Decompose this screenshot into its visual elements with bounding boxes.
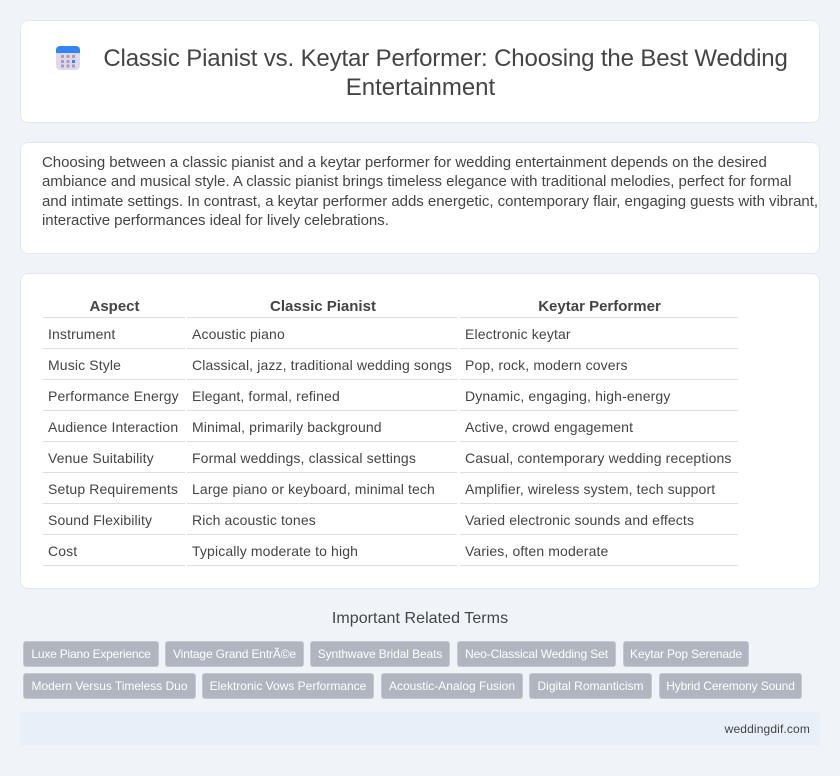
row: performance energy: Performance Energy xyxy=(48,388,179,404)
row: audience interaction: Minimal, primarily background xyxy=(192,419,382,435)
row: audience interaction: Audience Interaction xyxy=(48,419,178,435)
row: sound flexibility: Sound Flexibility xyxy=(48,512,152,528)
row: cost: Varies, often moderate xyxy=(465,543,608,559)
row: instrument: Acoustic piano xyxy=(192,326,285,342)
row: venue suitability xyxy=(48,450,732,466)
tag xyxy=(23,673,196,699)
tag xyxy=(457,641,616,667)
tag: Acoustic-Analog Fusion xyxy=(389,679,515,693)
intro paragraph: and intimate settings. In contrast, a keytar performer adds energetic, contemporary flair, engaging guests with vibrant, xyxy=(42,193,818,210)
tag xyxy=(23,641,159,667)
comparison table xyxy=(43,298,738,566)
table header: Classic Pianist xyxy=(270,298,376,315)
table header xyxy=(89,298,661,315)
tag: Vintage Grand EntrÃ©e xyxy=(173,647,296,661)
tag: Luxe Piano Experience xyxy=(31,647,151,661)
row: audience interaction: Active, crowd engagement xyxy=(465,419,633,435)
tag: Synthwave Bridal Beats xyxy=(318,647,442,661)
row: cost xyxy=(48,543,608,559)
tag: Modern Versus Timeless Duo xyxy=(32,679,187,693)
tag: Digital Romanticism xyxy=(537,679,644,693)
row: venue suitability: Venue Suitability xyxy=(48,450,154,466)
row: cost: Typically moderate to high xyxy=(192,543,358,559)
row: music style: Classical, jazz, traditional wedding songs xyxy=(192,357,452,373)
tag xyxy=(659,673,802,699)
row: performance energy: Elegant, formal, refined xyxy=(192,388,340,404)
row: music style: Music Style xyxy=(48,357,121,373)
row: instrument: Electronic keytar xyxy=(465,326,571,342)
tag xyxy=(202,673,374,699)
tag xyxy=(165,641,304,667)
tag: Keytar Pop Serenade xyxy=(630,647,742,661)
row: setup requirements: Setup Requirements xyxy=(48,481,178,497)
comparison table panel xyxy=(20,273,820,589)
row: setup requirements: Amplifier, wireless system, tech support xyxy=(465,481,715,497)
intro paragraph xyxy=(42,154,818,229)
row: setup requirements xyxy=(48,481,716,497)
row: performance energy xyxy=(48,388,670,404)
row: audience interaction xyxy=(48,419,633,435)
row: venue suitability: Formal weddings, classical settings xyxy=(192,450,416,466)
tag xyxy=(381,673,523,699)
title: Entertainment xyxy=(346,74,495,101)
row: cost: Cost xyxy=(48,543,77,559)
row: music style: Pop, rock, modern covers xyxy=(465,357,628,373)
tag xyxy=(529,673,652,699)
table header: Aspect xyxy=(89,298,140,315)
row: sound flexibility: Varied electronic sounds and effects xyxy=(465,512,694,528)
tag: Hybrid Ceremony Sound xyxy=(666,679,795,693)
intro paragraph: Choosing between a classic pianist and a keytar performer for wedding entertainment depends on the desired xyxy=(42,154,767,171)
footer bar xyxy=(20,712,820,746)
tag xyxy=(623,641,749,667)
related terms tags xyxy=(23,641,802,699)
related terms heading: Important Related Terms xyxy=(332,610,508,627)
row: setup requirements: Large piano or keyboard, minimal tech xyxy=(192,481,435,497)
table header: Keytar Performer xyxy=(538,298,661,315)
row: performance energy: Dynamic, engaging, high-energy xyxy=(465,388,670,404)
title xyxy=(103,45,788,101)
row: venue suitability: Casual, contemporary wedding receptions xyxy=(465,450,732,466)
intro paragraph: interactive performances ideal for lively celebrations. xyxy=(42,212,389,229)
row: instrument: Instrument xyxy=(48,326,115,342)
footer source: weddingdif.com xyxy=(725,722,810,736)
intro paragraph: ambiance and musical style. A classic pianist brings timeless elegance with traditional melodies, perfect for formal xyxy=(42,173,791,190)
title: Classic Pianist vs. Keytar Performer: Choosing the Best Wedding xyxy=(103,45,788,72)
row: sound flexibility: Rich acoustic tones xyxy=(192,512,316,528)
row: music style xyxy=(48,357,628,373)
tag: Neo-Classical Wedding Set xyxy=(465,647,608,661)
tag: Elektronic Vows Performance xyxy=(210,679,366,693)
header panel xyxy=(20,20,820,123)
row: instrument xyxy=(48,326,571,342)
tag xyxy=(310,641,450,667)
intro text panel xyxy=(20,142,820,254)
icon: calendar xyxy=(56,46,80,70)
row: sound flexibility xyxy=(48,512,694,528)
